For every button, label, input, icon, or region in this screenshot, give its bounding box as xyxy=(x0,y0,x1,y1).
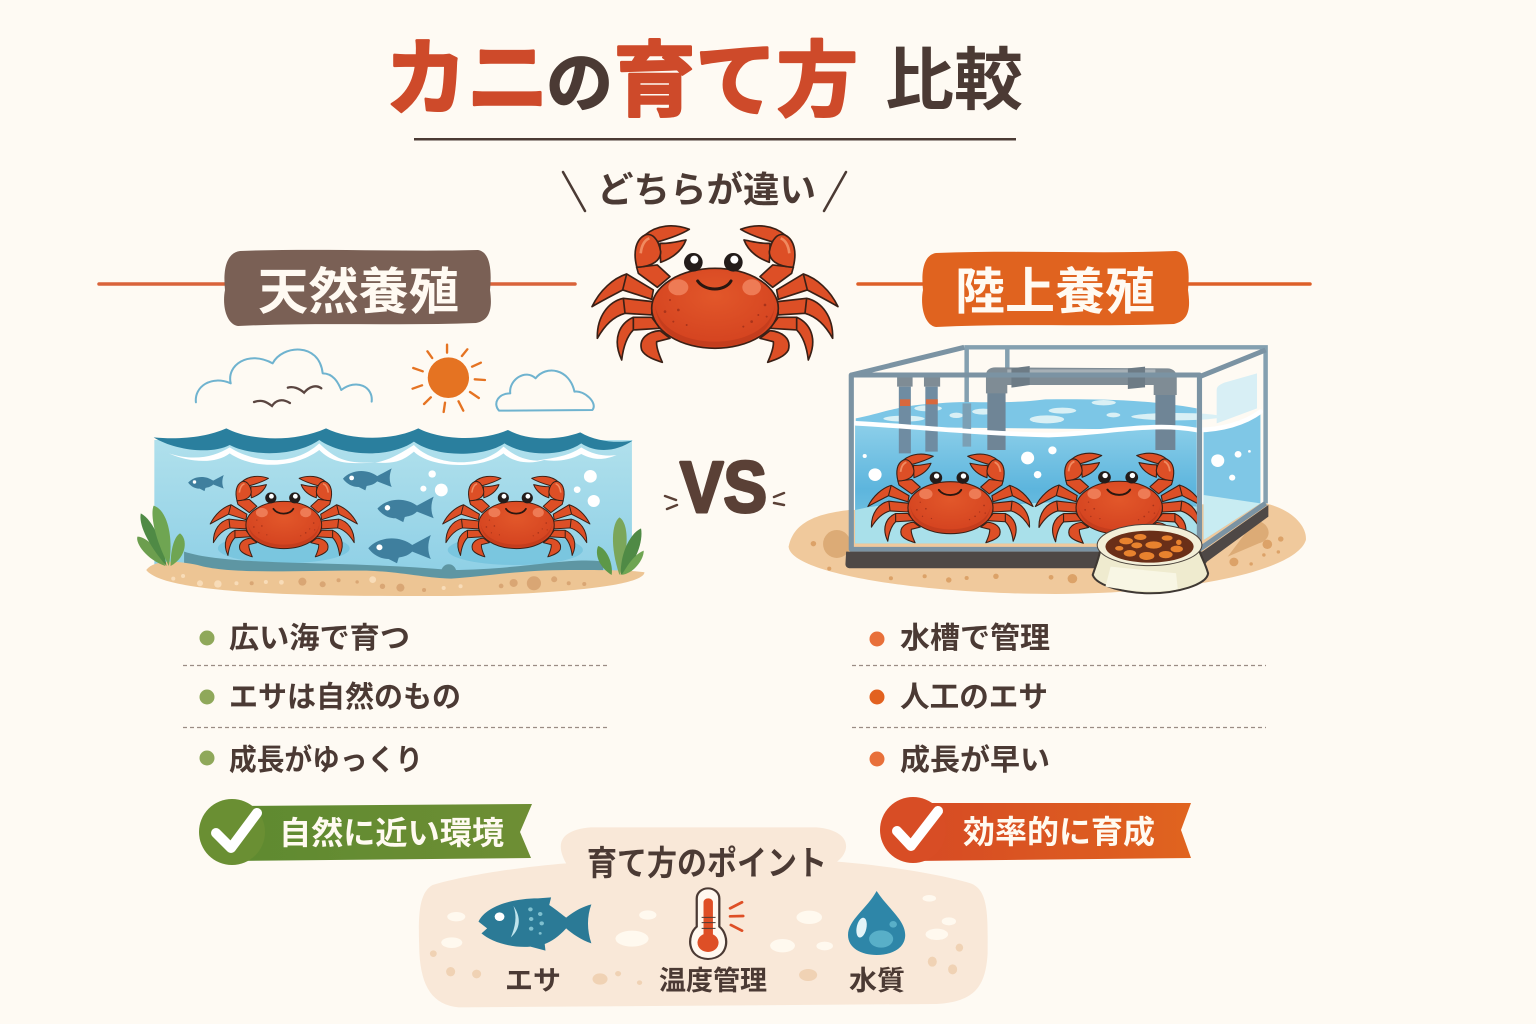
badge: efficient rearing: 効率的に育成 xyxy=(963,814,1155,850)
surface highlights xyxy=(883,400,1221,423)
heading: natural farming pill: 天然養殖 xyxy=(258,264,459,320)
list: land farming points xyxy=(852,622,1266,777)
title: の xyxy=(546,46,613,120)
subtitle: difference callout: どちらが違い xyxy=(597,169,816,210)
list: natural farming points: エサは自然のもの xyxy=(229,681,461,714)
icon: thermometer xyxy=(690,888,743,959)
heading: natural farming pill xyxy=(99,250,575,326)
panel: rearing points xyxy=(419,827,988,1007)
label: water quality: 水質 xyxy=(849,966,905,996)
pipes and heaters xyxy=(897,366,1177,453)
badge: close to nature: 自然に近い環境 xyxy=(279,815,504,851)
title xyxy=(385,32,1023,127)
illustration: natural sea scene xyxy=(137,345,644,596)
bowl of food xyxy=(1093,524,1208,593)
front frame of tank xyxy=(851,347,1266,549)
sand xyxy=(146,562,644,596)
tank base xyxy=(845,505,1268,568)
icons: fish xyxy=(188,468,434,563)
white wave line xyxy=(856,412,1260,435)
label: temperature control: 温度管理 xyxy=(659,966,767,996)
back frame of tank xyxy=(964,347,1266,503)
bubbles xyxy=(420,470,600,507)
list: land farming points: 水槽で管理 xyxy=(900,622,1050,655)
illustration: land tank scene xyxy=(789,347,1306,594)
crabs xyxy=(210,476,590,557)
title: 比較 xyxy=(885,43,1023,119)
heading: land farming pill xyxy=(858,251,1310,327)
panel speckles xyxy=(441,895,956,952)
water body xyxy=(855,422,1197,543)
list: natural farming points: 成長がゆっくり xyxy=(229,743,423,777)
panel heading: 育て方のポイント xyxy=(587,845,827,883)
title: カニ xyxy=(385,32,549,126)
seaweed left xyxy=(137,506,185,566)
icon: central crab xyxy=(592,226,838,362)
icon: sun xyxy=(413,345,485,412)
water body xyxy=(154,440,632,573)
crab shadows xyxy=(218,533,350,563)
birds xyxy=(254,386,321,406)
icon: water drop xyxy=(848,891,905,955)
list: natural farming points xyxy=(183,622,608,777)
side water xyxy=(1204,411,1260,540)
sand base xyxy=(789,503,1306,594)
seabed band xyxy=(184,552,603,582)
bubbles xyxy=(863,446,1251,481)
heading: land farming pill: 陸上養殖 xyxy=(955,264,1155,320)
clouds xyxy=(196,349,594,411)
badge: close to nature xyxy=(199,799,532,865)
badge: efficient rearing xyxy=(880,797,1191,863)
dark waves xyxy=(154,428,633,454)
icon: fish xyxy=(478,897,591,951)
back water surface xyxy=(856,399,1197,430)
seaweed right xyxy=(597,517,644,575)
white wave line xyxy=(169,443,617,465)
label: feed: エサ xyxy=(505,966,561,996)
list: land farming points: 成長が早い xyxy=(900,743,1050,777)
VS label: VS xyxy=(680,448,767,528)
list: natural farming points: 広い海で育つ xyxy=(229,622,410,655)
crabs xyxy=(868,453,1203,543)
title: 育て方 xyxy=(614,36,858,127)
sand specks xyxy=(250,576,586,592)
list: land farming points: 人工のエサ xyxy=(900,681,1048,714)
